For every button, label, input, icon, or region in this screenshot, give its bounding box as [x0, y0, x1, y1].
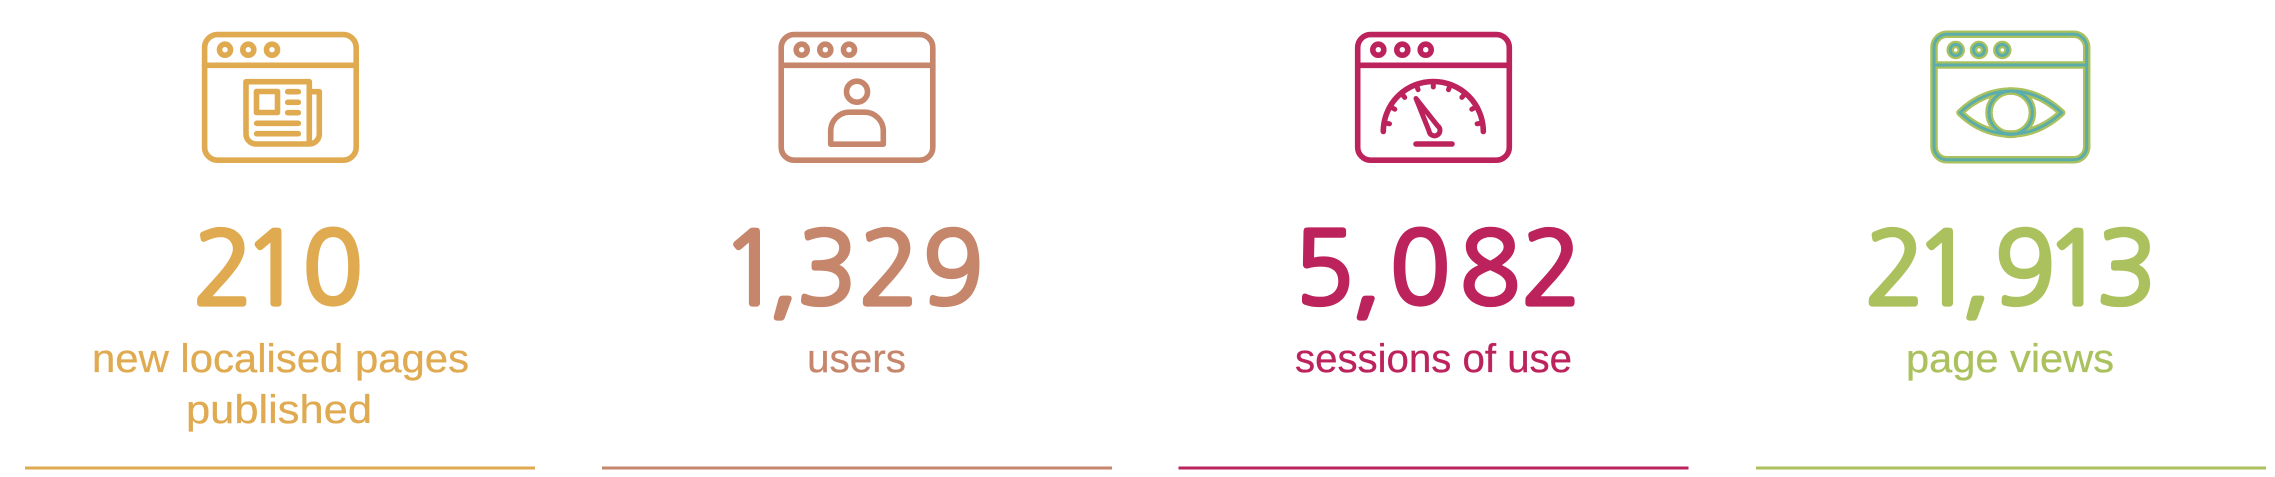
icon: browser window with speedometer	[1358, 35, 1509, 160]
number: 210: 210	[193, 219, 363, 319]
icon: browser window with newspaper	[205, 35, 356, 160]
label: page views: page views	[1906, 337, 2114, 381]
number: 5,082: 5,082	[1294, 219, 1582, 319]
divider line	[1178, 466, 1688, 470]
divider line	[602, 466, 1112, 470]
panel: sessions of use	[1178, 35, 1688, 469]
label: new localised pages published: published	[186, 388, 372, 432]
panel: users	[602, 35, 1112, 469]
icon: browser window with eye	[1934, 34, 2087, 160]
icon: browser window with user	[781, 35, 933, 160]
number: 21,913: 21,913	[1865, 219, 2157, 319]
label: new localised pages published	[92, 337, 469, 432]
label: users: users	[807, 337, 906, 381]
label: sessions of use: sessions of use	[1295, 337, 1572, 381]
panel: new localised pages	[25, 35, 535, 469]
label: new localised pages published: new localised pages	[92, 337, 469, 381]
panel: page views	[1756, 34, 2266, 470]
divider line	[1756, 466, 2266, 470]
divider line	[25, 466, 535, 470]
number: 1,329: 1,329	[721, 219, 983, 319]
